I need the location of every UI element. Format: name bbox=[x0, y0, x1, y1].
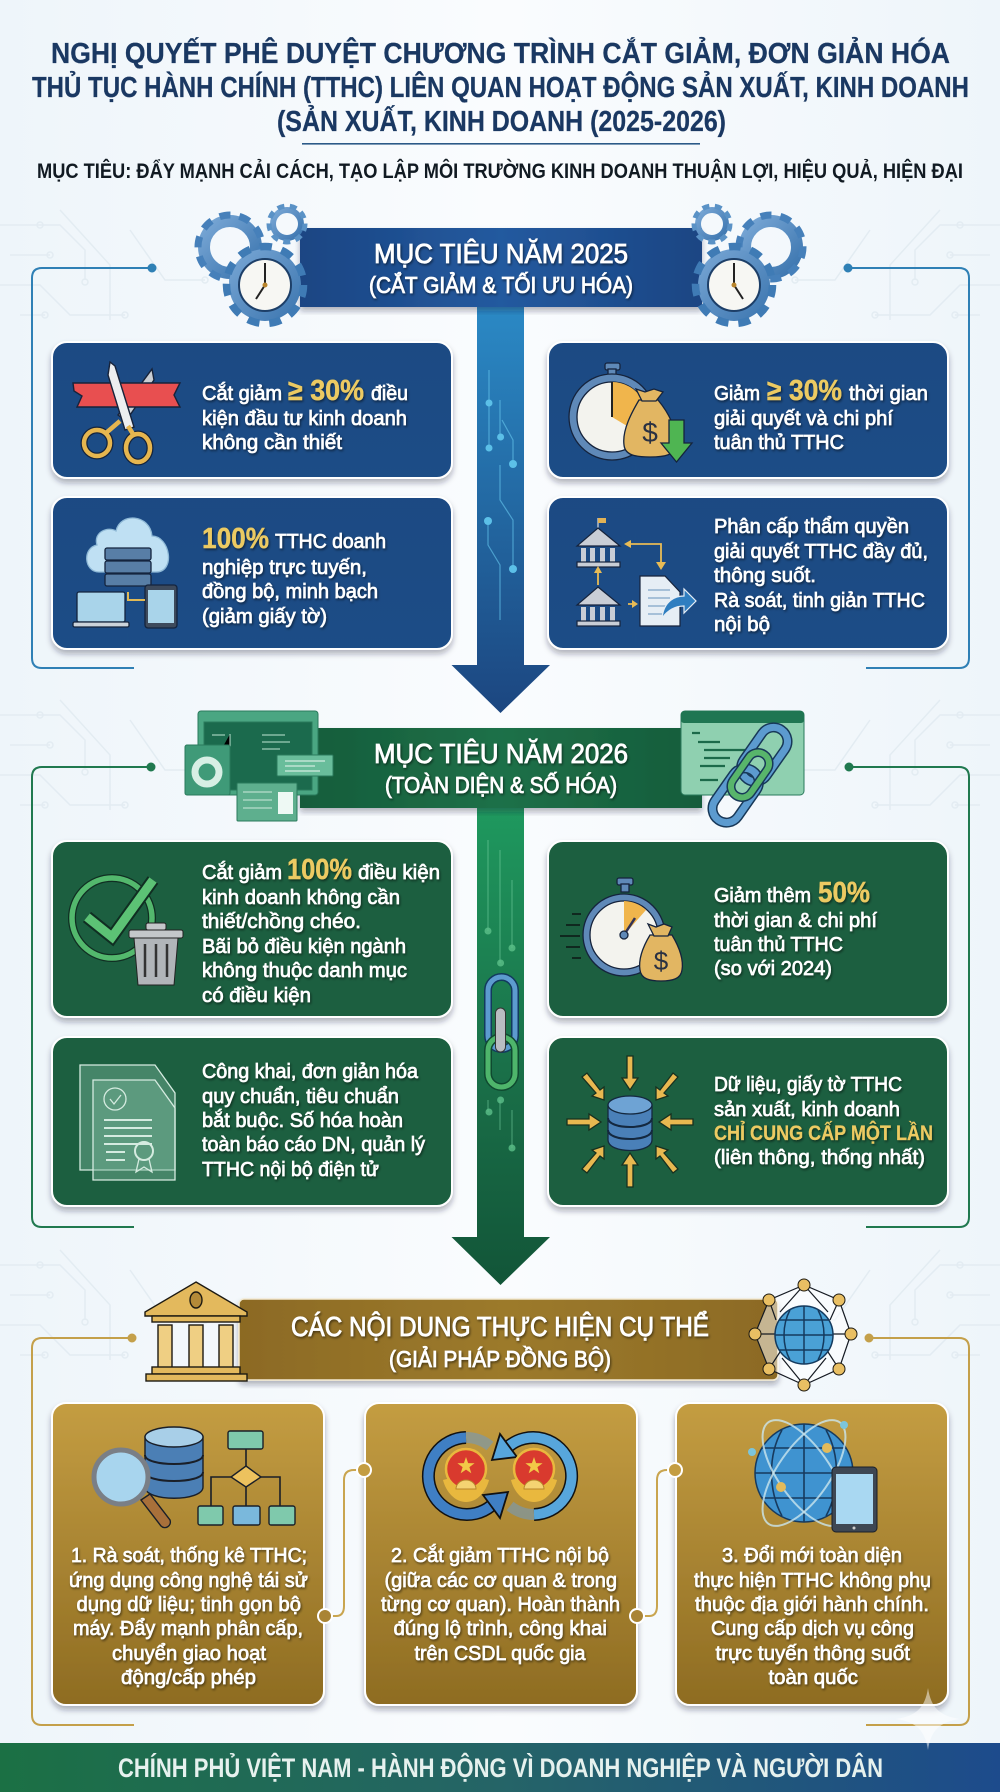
text: giải quyết và chi phí bbox=[714, 407, 893, 430]
icon: chain links on arrow bbox=[488, 977, 515, 1087]
text bbox=[381, 1544, 620, 1665]
arrow down 2026 bbox=[452, 800, 550, 1285]
text: (so với 2024) bbox=[714, 957, 832, 980]
text: động/cấp phép bbox=[121, 1666, 256, 1689]
side bracket right gold bbox=[866, 1334, 969, 1725]
text: Giảm thêm bbox=[714, 884, 811, 907]
card: cat giam 30% dieu kien bbox=[52, 342, 452, 478]
side bracket left 2026 bbox=[32, 764, 154, 1227]
icon: stopwatch money bag bbox=[560, 878, 682, 981]
title: NGHỊ QUYẾT PHÊ DUYỆT CHƯƠNG TRÌNH CẮT GIẢM, ĐƠN GIẢN HÓA bbox=[51, 37, 950, 70]
text: Dữ liệu, giấy tờ TTHC bbox=[714, 1073, 902, 1096]
panel: muc tieu 2025 bbox=[32, 206, 969, 713]
text bbox=[69, 1544, 308, 1689]
side bracket right 2025 bbox=[844, 264, 969, 668]
text: thời gian & chi phí bbox=[714, 909, 877, 932]
text: 100% bbox=[202, 523, 269, 555]
text: kiện đầu tư kinh doanh bbox=[202, 407, 407, 430]
icon: cycle arrows and emblems bbox=[428, 1434, 572, 1518]
icon: institutions and document bbox=[577, 518, 696, 626]
text: Cắt giảm bbox=[202, 861, 282, 884]
text bbox=[202, 1060, 426, 1181]
card 1: ra soat thong ke bbox=[52, 1403, 324, 1705]
icon: database magnifier flowchart bbox=[94, 1427, 295, 1528]
text: Cắt giảm bbox=[202, 382, 282, 405]
icon: government building bbox=[145, 1282, 247, 1381]
text: ≥ 30% bbox=[288, 375, 364, 407]
card 3: doi moi toan dien bbox=[676, 1403, 948, 1705]
icon: scissors and ribbon bbox=[73, 362, 180, 462]
text: điều kiện bbox=[358, 861, 440, 884]
banner 2026 bbox=[300, 728, 702, 808]
text: từng cơ quan). Hoàn thành bbox=[381, 1593, 620, 1616]
side bracket left gold bbox=[32, 1334, 136, 1725]
text bbox=[714, 1073, 933, 1169]
icon: translucent documents bbox=[80, 1065, 175, 1180]
text: đúng lộ trình, công khai bbox=[394, 1617, 607, 1640]
text: (liên thông, thống nhất) bbox=[714, 1146, 925, 1169]
text: đồng bộ, minh bạch bbox=[202, 580, 378, 603]
card: giam them 50% bbox=[548, 841, 948, 1017]
text: (giảm giấy tờ) bbox=[202, 605, 327, 628]
icon: stopwatch money bag: $ bbox=[642, 417, 658, 448]
text: Bãi bỏ điều kiện ngành bbox=[202, 935, 406, 958]
icon: globe and tablet bbox=[747, 1407, 877, 1539]
card: giam 30% thoi gian bbox=[548, 342, 948, 478]
text: bắt buộc. Số hóa hoàn bbox=[202, 1109, 403, 1132]
icon: code window and chain bbox=[681, 711, 804, 828]
text: chuyển giao hoạt bbox=[112, 1642, 266, 1665]
card: cat giam 100% bbox=[52, 841, 452, 1017]
text: có điều kiện bbox=[202, 984, 311, 1007]
text bbox=[714, 515, 928, 636]
banner 2026: MỤC TIÊU NĂM 2026 bbox=[374, 738, 628, 769]
card: phan cap tham quyen bbox=[548, 497, 948, 649]
text bbox=[714, 375, 928, 454]
text: Rà soát, tinh giản TTHC bbox=[714, 589, 925, 612]
text: thời gian bbox=[849, 382, 928, 405]
text: Cung cấp dịch vụ công bbox=[711, 1617, 914, 1640]
icon: stopwatch money bag: $ bbox=[654, 946, 669, 976]
card: du lieu chi cung cap mot lan bbox=[548, 1037, 948, 1206]
text: tuân thủ TTHC bbox=[714, 431, 844, 454]
footer bbox=[0, 1743, 1000, 1792]
banner 2025: (CẮT GIẢM & TỐI ƯU HÓA) bbox=[369, 270, 633, 298]
title bbox=[32, 37, 969, 145]
text: kinh doanh không cần bbox=[202, 886, 400, 909]
text: CHỈ CUNG CẤP MỘT LẦN bbox=[714, 1121, 933, 1145]
text: TTHC doanh bbox=[275, 530, 386, 553]
icon: globe network bbox=[749, 1279, 857, 1391]
text: 100% bbox=[287, 854, 352, 886]
text: thuộc địa giới hành chính. bbox=[695, 1593, 929, 1616]
banner 2025 bbox=[300, 228, 702, 307]
connector card 2 to 3 bbox=[630, 1463, 682, 1623]
card 2: cat giam TTHC noi bo bbox=[365, 1403, 637, 1705]
text: Phân cấp thẩm quyền bbox=[714, 515, 909, 538]
text: máy. Đẩy mạnh phân cấp, bbox=[73, 1617, 303, 1640]
side bracket left 2025 bbox=[32, 264, 156, 668]
panel: cac noi dung thuc hien bbox=[32, 1279, 969, 1725]
text: không thuộc danh mục bbox=[202, 959, 407, 982]
card: cong khai don gian hoa bbox=[52, 1037, 452, 1206]
sparkle watermark bbox=[896, 1688, 960, 1750]
connector card 1 to 2 bbox=[318, 1463, 371, 1623]
banner 2026: (TOÀN DIỆN & SỐ HÓA) bbox=[385, 771, 617, 798]
text bbox=[202, 523, 386, 628]
text: Công khai, đơn giản hóa bbox=[202, 1060, 419, 1083]
text: thông suốt. bbox=[714, 564, 816, 587]
banner giai phap: CÁC NỘI DUNG THỰC HIỆN CỤ THỂ bbox=[291, 1311, 709, 1342]
card: 100% TTHC truc tuyen bbox=[52, 497, 452, 649]
icon: database with arrows bbox=[567, 1056, 693, 1187]
text: (giữa các cơ quan & trong bbox=[384, 1569, 617, 1592]
banner giai phap bbox=[239, 1299, 778, 1380]
icon: gears clock left bbox=[198, 206, 305, 324]
text: toàn quốc bbox=[768, 1666, 858, 1689]
text: ứng dụng công nghệ tái sử bbox=[69, 1569, 308, 1592]
text: TTHC nội bộ điện tử bbox=[202, 1158, 379, 1181]
text: nội bộ bbox=[714, 613, 770, 636]
banner giai phap: (GIẢI PHÁP ĐỒNG BỘ) bbox=[389, 1344, 611, 1372]
text: tuân thủ TTHC bbox=[714, 933, 843, 956]
text: điều bbox=[371, 382, 408, 405]
text: quy chuẩn, tiêu chuẩn bbox=[202, 1085, 399, 1108]
panel: muc tieu 2026 bbox=[32, 711, 969, 1285]
icon: check and trash bbox=[72, 878, 183, 985]
title: (SẢN XUẤT, KINH DOANH (2025-2026) bbox=[277, 105, 726, 138]
text: ≥ 30% bbox=[767, 375, 842, 407]
text bbox=[694, 1544, 931, 1689]
text bbox=[714, 877, 877, 980]
icon: dashboard windows bbox=[185, 711, 333, 821]
text: nghiệp trực tuyến, bbox=[202, 556, 367, 579]
text: giải quyết TTHC đầy đủ, bbox=[714, 540, 928, 563]
text: toàn báo cáo DN, quản lý bbox=[202, 1133, 426, 1156]
text: dụng dữ liệu; tinh gọn bộ bbox=[76, 1593, 301, 1616]
text: 2. Cắt giảm TTHC nội bộ bbox=[391, 1544, 609, 1567]
text: 1. Rà soát, thống kê TTHC; bbox=[71, 1544, 307, 1567]
text: thiết/chồng chéo. bbox=[202, 910, 361, 933]
icon: cloud servers devices bbox=[73, 518, 177, 628]
text: Giảm bbox=[714, 382, 760, 405]
text: 50% bbox=[818, 877, 870, 909]
text: không cần thiết bbox=[202, 431, 342, 454]
text: sản xuất, kinh doanh bbox=[714, 1098, 900, 1121]
arrow down 2025 bbox=[452, 300, 550, 713]
text: thực hiện TTHC không phụ bbox=[694, 1569, 931, 1592]
text: 3. Đổi mới toàn diện bbox=[722, 1544, 902, 1567]
side bracket right 2026 bbox=[846, 764, 969, 1227]
text: trực tuyến thông suốt bbox=[716, 1642, 910, 1665]
icon: gears clock right bbox=[694, 206, 803, 324]
banner 2025: MỤC TIÊU NĂM 2025 bbox=[374, 238, 628, 269]
text: trên CSDL quốc gia bbox=[414, 1642, 586, 1665]
text bbox=[202, 375, 408, 454]
icon: stopwatch money bag bbox=[569, 363, 692, 462]
text bbox=[202, 854, 440, 1007]
